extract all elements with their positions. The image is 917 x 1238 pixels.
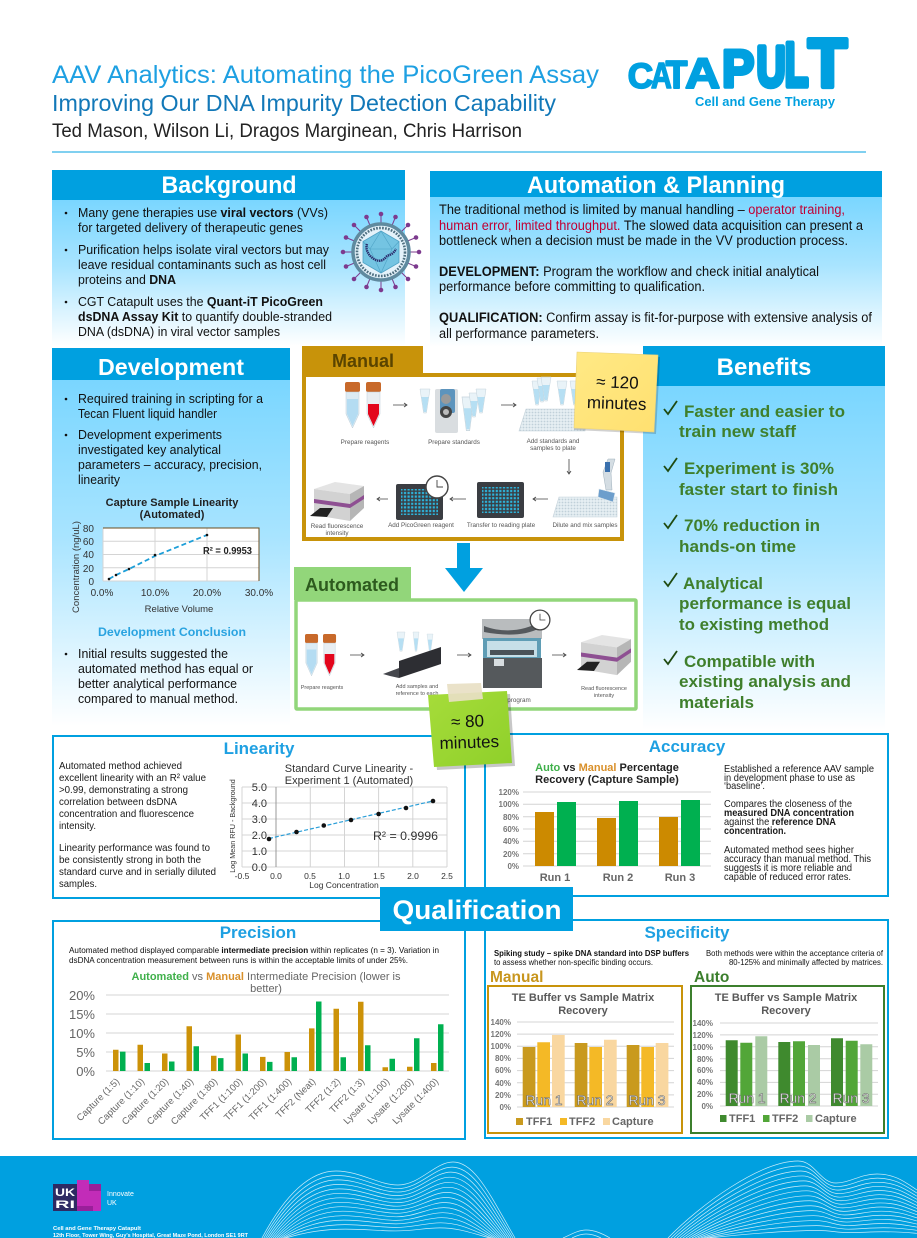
logo: Catapult Cell and Gene Therapy: P	[722, 39, 754, 98]
chart: standard curve linearity: Log Concentration	[309, 880, 379, 890]
chart: standard curve linearity: Standard Curve Linearity -	[285, 763, 414, 775]
step: prepare standards	[420, 389, 486, 446]
text: accuracy description: suggests it is more reliable and	[724, 862, 852, 874]
chart: auto recovery: 100%	[693, 1043, 713, 1052]
text: development bullets: investigated key analytical	[78, 443, 221, 457]
step: dilute and mix samples	[552, 459, 618, 529]
text: conclusion bullet: Initial results suggested the	[78, 647, 228, 661]
logo: Catapult Cell and Gene Therapy: T	[666, 52, 688, 96]
text: automation description: DEVELOPMENT: Program the workflow and check initial analytical	[439, 264, 819, 279]
chart: manual recovery: Recovery	[558, 1005, 609, 1017]
panel: background	[52, 170, 421, 346]
text: spiking study: Spiking study – spike DNA standard into DSP buffers	[494, 948, 689, 958]
text: linearity description: be consistently strong in both the	[59, 854, 201, 866]
chart: manual recovery: TFF1	[526, 1116, 552, 1128]
heading: auto: Auto	[694, 969, 729, 986]
chart: capture sample linearity: 20.0%	[193, 588, 221, 599]
chart: intermediate precision: 20%	[69, 988, 95, 1003]
chart: intermediate precision: TFF2 (1:3)	[328, 1076, 367, 1116]
text: development bullets: Tecan Fluent liquid handler	[78, 407, 217, 421]
arrow	[567, 459, 571, 474]
step: add samples and reference: reference to each	[396, 691, 438, 697]
chart: percentage recovery: 60%	[503, 825, 519, 834]
text: acceptance criteria: Both methods were within the acceptance criteria of	[706, 948, 884, 958]
chart: capture sample linearity: Concentration (ng/uL)	[71, 521, 82, 613]
text: accuracy description: concentration.	[724, 825, 786, 837]
chart: manual recovery: 140%	[491, 1018, 511, 1027]
step: dilute and mix samples: Dilute and mix samples	[552, 522, 618, 529]
panel: benefits	[643, 346, 885, 730]
step: run automated program: program	[507, 697, 531, 704]
chart: auto recovery: Run 2	[780, 1090, 817, 1106]
chart: manual recovery: TFF2	[569, 1116, 595, 1128]
heading: automation and planning: Automation & Planning	[527, 172, 785, 199]
benefit: analytical performance: Analytical	[683, 575, 763, 593]
text: accuracy description: Automated method sees higher	[724, 844, 854, 856]
heading: linearity: Linearity	[224, 739, 295, 758]
chart: standard curve linearity: 2.0	[407, 871, 419, 881]
chart: standard curve linearity: 0.0	[270, 871, 282, 881]
chart: standard curve linearity: 3.0	[252, 814, 267, 826]
text: development bullets: Development experiments	[78, 428, 222, 442]
heading: development: Development	[98, 354, 244, 380]
text: acceptance criteria: 80-125% and minimally affected by matrices.	[729, 957, 883, 967]
chart: standard curve linearity: 2.5	[441, 871, 453, 881]
logo: Catapult Cell and Gene Therapy: T	[808, 26, 847, 102]
text: linearity description: samples.	[59, 878, 97, 890]
text: precision description	[69, 945, 439, 965]
callout: 80 minutes note: minutes	[439, 732, 499, 753]
chart: percentage recovery: Recovery (Capture Sample)	[535, 774, 679, 786]
chart: intermediate precision: 0%	[76, 1064, 95, 1079]
text: address: Cell and Gene Therapy Catapult	[53, 1226, 141, 1232]
benefit: faster experiment	[664, 458, 838, 499]
chart: manual recovery: TE Buffer vs Sample Matrix	[512, 992, 655, 1004]
text: automation description: The traditional method is limited by manual handling – operator training,	[439, 202, 845, 217]
benefit: faster to train	[664, 401, 845, 441]
text: linearity description: excellent linearity with an R² value	[59, 772, 206, 784]
benefit: compatibility: Compatible with	[684, 653, 815, 671]
banner: qualification: Qualification	[392, 895, 562, 925]
chart: manual recovery	[488, 986, 682, 1133]
text: accuracy description: measured DNA concentration	[724, 807, 854, 819]
chart: standard curve linearity: 0.5	[304, 871, 316, 881]
chart: standard curve linearity: 5.0	[252, 782, 267, 794]
arrow	[450, 497, 466, 501]
text: accuracy description: Established a reference AAV sample	[724, 763, 874, 775]
chart: standard curve linearity	[228, 763, 453, 890]
panel: development	[52, 348, 290, 726]
step: run automated program	[482, 610, 550, 704]
text: development bullets: linearity	[78, 473, 121, 487]
arrow	[501, 403, 516, 407]
chart: auto recovery: 60%	[697, 1066, 713, 1075]
chart: intermediate precision: TFF1 (1:400)	[247, 1076, 294, 1123]
chart: manual recovery: 120%	[491, 1030, 511, 1039]
logo: UKRI Innovate UK: UK	[55, 1187, 75, 1199]
logo: Catapult Cell and Gene Therapy: Cell and Gene Therapy	[695, 94, 836, 109]
benefit: compatibility: existing analysis and	[679, 673, 851, 691]
heading: specificity: Specificity	[644, 923, 730, 942]
chart: capture sample linearity: 20	[83, 564, 94, 575]
step: read fluorescence: Read fluorescence	[581, 686, 627, 692]
panel: linearity	[53, 736, 465, 898]
benefit: faster experiment: faster start to finish	[679, 481, 838, 499]
chart: capture sample linearity: 40	[83, 550, 94, 561]
step: add samples and reference	[383, 632, 441, 697]
chart: percentage recovery: Auto vs Manual Percentage	[535, 762, 679, 774]
benefit: faster to train: train new staff	[679, 423, 797, 441]
chart: intermediate precision	[69, 971, 449, 1127]
chart: intermediate precision: Capture (1:80)	[169, 1076, 220, 1127]
text: automation description: bottleneck when a decision must be made in the VV production process.	[439, 233, 848, 248]
callout: 120 minutes note: ≈ 120	[596, 372, 639, 393]
text: development bullets: parameters – accuracy, precision,	[78, 458, 262, 472]
chart: manual recovery: 20%	[495, 1091, 511, 1100]
step: transfer to reading plate	[467, 482, 536, 529]
heading: accuracy: Accuracy	[649, 737, 726, 756]
chart: intermediate precision: TFF2 (1:2)	[304, 1076, 343, 1116]
chart: auto recovery: 20%	[697, 1090, 713, 1099]
chart: auto recovery: Run 1	[728, 1090, 766, 1106]
logo: Catapult Cell and Gene Therapy: L	[785, 30, 808, 99]
chart: intermediate precision: TFF1 (1:200)	[222, 1076, 269, 1123]
chart: capture sample linearity: 60	[83, 537, 94, 548]
chart: capture sample linearity: 10.0%	[141, 588, 169, 599]
chart: intermediate precision: better)	[250, 983, 282, 995]
chart: percentage recovery: 100%	[499, 800, 519, 809]
subtitle: Improving Our DNA Impurity Detection Capability	[52, 90, 556, 116]
text: conclusion bullet: compared to manual method.	[78, 692, 238, 706]
step: read fluorescence	[310, 482, 364, 537]
logo: Catapult Cell and Gene Therapy: C	[628, 57, 653, 96]
chart: percentage recovery: 0%	[507, 862, 519, 871]
benefit: hands-on time	[664, 515, 820, 556]
chart: intermediate precision: 15%	[69, 1007, 95, 1022]
arrow	[457, 653, 471, 657]
arrow	[533, 497, 548, 501]
chart: capture sample linearity: Capture Sample Linearity	[106, 497, 239, 509]
heading: background: Background	[162, 172, 296, 199]
chart: standard curve linearity: 0.0	[252, 862, 267, 874]
chart: intermediate precision: Lysate (1:100)	[342, 1076, 392, 1127]
text: address	[53, 1226, 249, 1238]
text: background bullets: CGT Catapult uses the Quant-iT PicoGreen	[78, 295, 323, 309]
text: accuracy description: in development phase to use as	[724, 772, 855, 784]
callout: 120 minutes note: minutes	[587, 393, 647, 414]
text: linearity description	[59, 760, 216, 890]
text: conclusion bullet: better analytical performance	[78, 677, 237, 691]
chart: intermediate precision: TFF2 (Neat)	[274, 1076, 318, 1121]
benefit: analytical performance	[664, 573, 851, 634]
panel: specificity	[485, 920, 888, 1138]
chart: auto recovery	[691, 986, 884, 1133]
callout: 80 minutes note	[428, 683, 515, 770]
chart: standard curve linearity: 1.0	[338, 871, 350, 881]
text: background bullets: dsDNA Assay Kit to quantify double-stranded	[78, 310, 332, 324]
chart: intermediate precision: Lysate (1:200)	[366, 1076, 416, 1127]
chart: percentage recovery: 120%	[499, 788, 519, 797]
chart: auto recovery: 120%	[693, 1031, 713, 1040]
heading: manual: Manual	[490, 969, 543, 986]
text: background bullets	[65, 206, 332, 339]
logo: UKRI Innovate UK: RI	[55, 1199, 75, 1211]
chart: percentage recovery	[499, 762, 711, 884]
logo: UKRI Innovate UK: UK	[107, 1200, 117, 1207]
chart: intermediate precision: Lysate (1:400)	[391, 1076, 441, 1127]
step: read fluorescence: intensity	[594, 693, 614, 699]
chart: auto recovery: 140%	[693, 1019, 713, 1028]
arrow	[350, 653, 364, 657]
chart: intermediate precision: Capture (1:40)	[145, 1076, 196, 1127]
icon: virus	[341, 212, 421, 292]
text: background bullets: leave residual contaminants such as host cell	[78, 258, 326, 272]
text: acceptance criteria	[706, 948, 884, 967]
step: add picogreen reagent: Add PicoGreen reagent	[388, 522, 454, 529]
text: accuracy description	[724, 763, 874, 883]
text: accuracy description: accuracy than manual method. This	[724, 853, 871, 865]
chart: intermediate precision: Capture (1:10)	[96, 1076, 147, 1127]
step: add standards and samples	[519, 377, 585, 452]
chart: standard curve linearity: 1.5	[373, 871, 385, 881]
chart: intermediate precision: 10%	[69, 1026, 95, 1041]
chart: standard curve linearity: 1.0	[252, 846, 267, 858]
chart: intermediate precision: TFF1 (1:100)	[198, 1076, 245, 1123]
text: background bullets: for targeted delivery of therapeutic genes	[78, 221, 303, 235]
text: background bullets: DNA (dsDNA) in viral vector samples	[78, 325, 280, 339]
text: background bullets: Purification helps isolate viral vectors but may	[78, 243, 330, 257]
logo: UKRI Innovate UK	[53, 1180, 134, 1211]
chart: standard curve linearity: 2.0	[252, 830, 267, 842]
text: background bullets: proteins and DNA	[78, 273, 176, 287]
chart: percentage recovery: 20%	[503, 850, 519, 859]
benefit: analytical performance: to existing method	[679, 616, 829, 634]
chart: manual recovery: 40%	[495, 1079, 511, 1088]
text: accuracy description: ‘baseline’.	[724, 780, 765, 792]
text: precision description: Automated method displayed comparable intermediate precision within replicates (n = 3). Variation in	[69, 945, 439, 955]
chart: percentage recovery: 80%	[503, 813, 519, 822]
step: add standards and samples: samples to plate	[530, 445, 576, 452]
text: automation description: human error, limited throughput. The slowed data acquisition can present a	[439, 218, 863, 233]
chart: standard curve linearity: Experiment 1 (Automated)	[285, 775, 413, 787]
step: add samples and reference: Add samples and	[396, 684, 438, 690]
callout: 80 minutes note: ≈ 80	[451, 711, 484, 732]
arrow	[377, 497, 388, 501]
arrow	[552, 653, 566, 657]
chart: capture sample linearity: 80	[83, 524, 94, 535]
text: linearity description: >0.99, demonstrating a strong	[59, 784, 188, 796]
text: linearity description: intensity.	[59, 820, 96, 832]
text: accuracy description: capable of reduced error rates.	[724, 871, 851, 883]
chart: capture sample linearity: 30.0%	[245, 588, 273, 599]
chart: auto recovery: TFF1	[729, 1113, 755, 1125]
panel: automation and planning	[430, 171, 882, 347]
text: development bullets: Required training in scripting for a	[78, 392, 263, 406]
footer	[0, 1156, 917, 1238]
text: conclusion bullet: automated method has equal or	[78, 662, 253, 676]
text: accuracy description: Compares the closeness of the	[724, 798, 852, 810]
chart: manual recovery: 0%	[499, 1103, 511, 1112]
step: prepare standards: Prepare standards	[428, 439, 480, 446]
chart: percentage recovery: Run 3	[665, 872, 695, 884]
chart: capture sample linearity	[71, 497, 273, 615]
chart: auto recovery: TE Buffer vs Sample Matrix	[715, 992, 858, 1004]
chart: manual recovery: Run 1	[526, 1092, 563, 1108]
chart: intermediate precision: Automated vs Manual Intermediate Precision (lower is	[132, 971, 401, 983]
chart: percentage recovery: Run 1	[540, 872, 570, 884]
panel: manual workflow	[302, 346, 622, 539]
chart: capture sample linearity: (Automated)	[140, 509, 205, 521]
step: prepare reagents	[341, 382, 389, 446]
text: automation description: performance before committing to qualification.	[439, 279, 705, 294]
chart: auto recovery: 80%	[697, 1055, 713, 1064]
chart: auto recovery: 40%	[697, 1078, 713, 1087]
step: prepare reagents: Prepare reagents	[341, 439, 389, 446]
step: prepare reagents: Prepare reagents	[301, 685, 343, 691]
text: linearity description: Automated method achieved	[59, 760, 182, 772]
text: linearity description: concentration and fluorescence	[59, 808, 194, 820]
step: add standards and samples: Add standards and	[527, 438, 580, 445]
heading: manual: Manual	[332, 351, 394, 371]
text: spiking study: to assess whether non-specific binding occurs.	[494, 957, 653, 967]
benefit: hands-on time: 70% reduction in	[684, 517, 820, 535]
panel: automated workflow	[294, 567, 636, 709]
benefit: compatibility: materials	[679, 694, 754, 712]
benefit: faster to train: Faster and easier to	[684, 403, 845, 421]
chart: auto recovery: Recovery	[761, 1005, 812, 1017]
chart: capture sample linearity: R² = 0.9953	[203, 546, 252, 557]
text: development bullets	[65, 392, 263, 487]
step: read fluorescence: intensity	[325, 530, 349, 537]
chart: manual recovery: Run 2	[576, 1092, 614, 1108]
chart: auto recovery: TFF2	[772, 1113, 798, 1125]
text: accuracy description: against the reference DNA	[724, 816, 836, 828]
chart: manual recovery: Capture	[612, 1116, 654, 1128]
chart: capture sample linearity: Relative Volume	[145, 604, 213, 615]
text: conclusion bullet	[65, 647, 253, 706]
heading: automated: Automated	[305, 575, 399, 595]
text: automation description: all performance parameters.	[439, 326, 599, 341]
text: linearity description: Linearity performance was found to	[59, 842, 210, 854]
panel: precision	[53, 921, 465, 1139]
chart: standard curve linearity: 4.0	[252, 798, 267, 810]
chart: standard curve linearity: Log Mean RFU - Background	[228, 779, 237, 873]
chart: percentage recovery: Run 2	[603, 872, 633, 884]
chart: intermediate precision: 5%	[76, 1045, 95, 1060]
authors: Ted Mason, Wilson Li, Dragos Marginean, Chris Harrison	[52, 121, 522, 142]
text: spiking study	[494, 948, 689, 967]
chart: capture sample linearity: 0.0%	[91, 588, 114, 599]
chart: standard curve linearity: -0.5	[235, 871, 250, 881]
chart: manual recovery: 80%	[495, 1054, 511, 1063]
chart: intermediate precision: Capture (1:5)	[75, 1076, 122, 1124]
chart: percentage recovery: 40%	[503, 837, 519, 846]
text: background bullets: Many gene therapies use viral vectors (VVs)	[78, 206, 328, 220]
logo: Catapult Cell and Gene Therapy: A	[651, 55, 672, 96]
heading: benefits: Benefits	[717, 354, 811, 381]
arrow: manual to automated	[445, 543, 483, 592]
banner: qualification	[380, 887, 573, 931]
chart: auto recovery: Capture	[815, 1113, 857, 1125]
panel: accuracy	[485, 734, 888, 896]
text: automation description: QUALIFICATION: Confirm assay is fit-for-purpose with extensive analysis of	[439, 310, 872, 325]
chart: manual recovery: 100%	[491, 1042, 511, 1051]
benefit: compatibility	[664, 651, 851, 712]
logo: Catapult Cell and Gene Therapy	[628, 26, 847, 109]
chart: auto recovery: 0%	[701, 1102, 713, 1111]
text: automation description	[439, 202, 872, 341]
step: transfer to reading plate: Transfer to reading plate	[467, 522, 536, 529]
heading: development conclusion: Development Conclusion	[98, 625, 246, 639]
arrow	[393, 403, 407, 407]
step: read fluorescence	[577, 635, 631, 699]
benefit: hands-on time: hands-on time	[679, 538, 796, 556]
logo: Catapult Cell and Gene Therapy: U	[757, 35, 785, 99]
text: precision description: dsDNA concentration measurement between runs is within the acceptable limits of under 25%.	[69, 955, 408, 965]
benefit: faster experiment: Experiment is 30%	[684, 460, 834, 478]
step: prepare reagents	[301, 634, 343, 691]
heading: precision: Precision	[220, 923, 296, 942]
callout: 120 minutes note	[574, 352, 660, 434]
chart: manual recovery: 60%	[495, 1066, 511, 1075]
chart: manual recovery: Run 3	[628, 1092, 666, 1108]
chart: capture sample linearity: 0	[88, 577, 94, 588]
benefit: analytical performance: performance is equal	[679, 595, 851, 613]
chart: auto recovery: Run 3	[832, 1090, 870, 1106]
text: linearity description: standard curve and in serially diluted	[59, 866, 216, 878]
chart: intermediate precision: Capture (1:20)	[120, 1076, 171, 1127]
step: read fluorescence: Read fluorescence	[311, 523, 364, 530]
step: add picogreen reagent	[388, 476, 454, 529]
title: AAV Analytics: Automating the PicoGreen Assay	[52, 61, 600, 89]
logo: UKRI Innovate UK: Innovate	[107, 1191, 134, 1198]
logo: Catapult Cell and Gene Therapy: A	[685, 49, 720, 97]
chart: standard curve linearity: R² = 0.9996	[373, 829, 438, 843]
text: linearity description: correlation between dsDNA	[59, 796, 177, 808]
